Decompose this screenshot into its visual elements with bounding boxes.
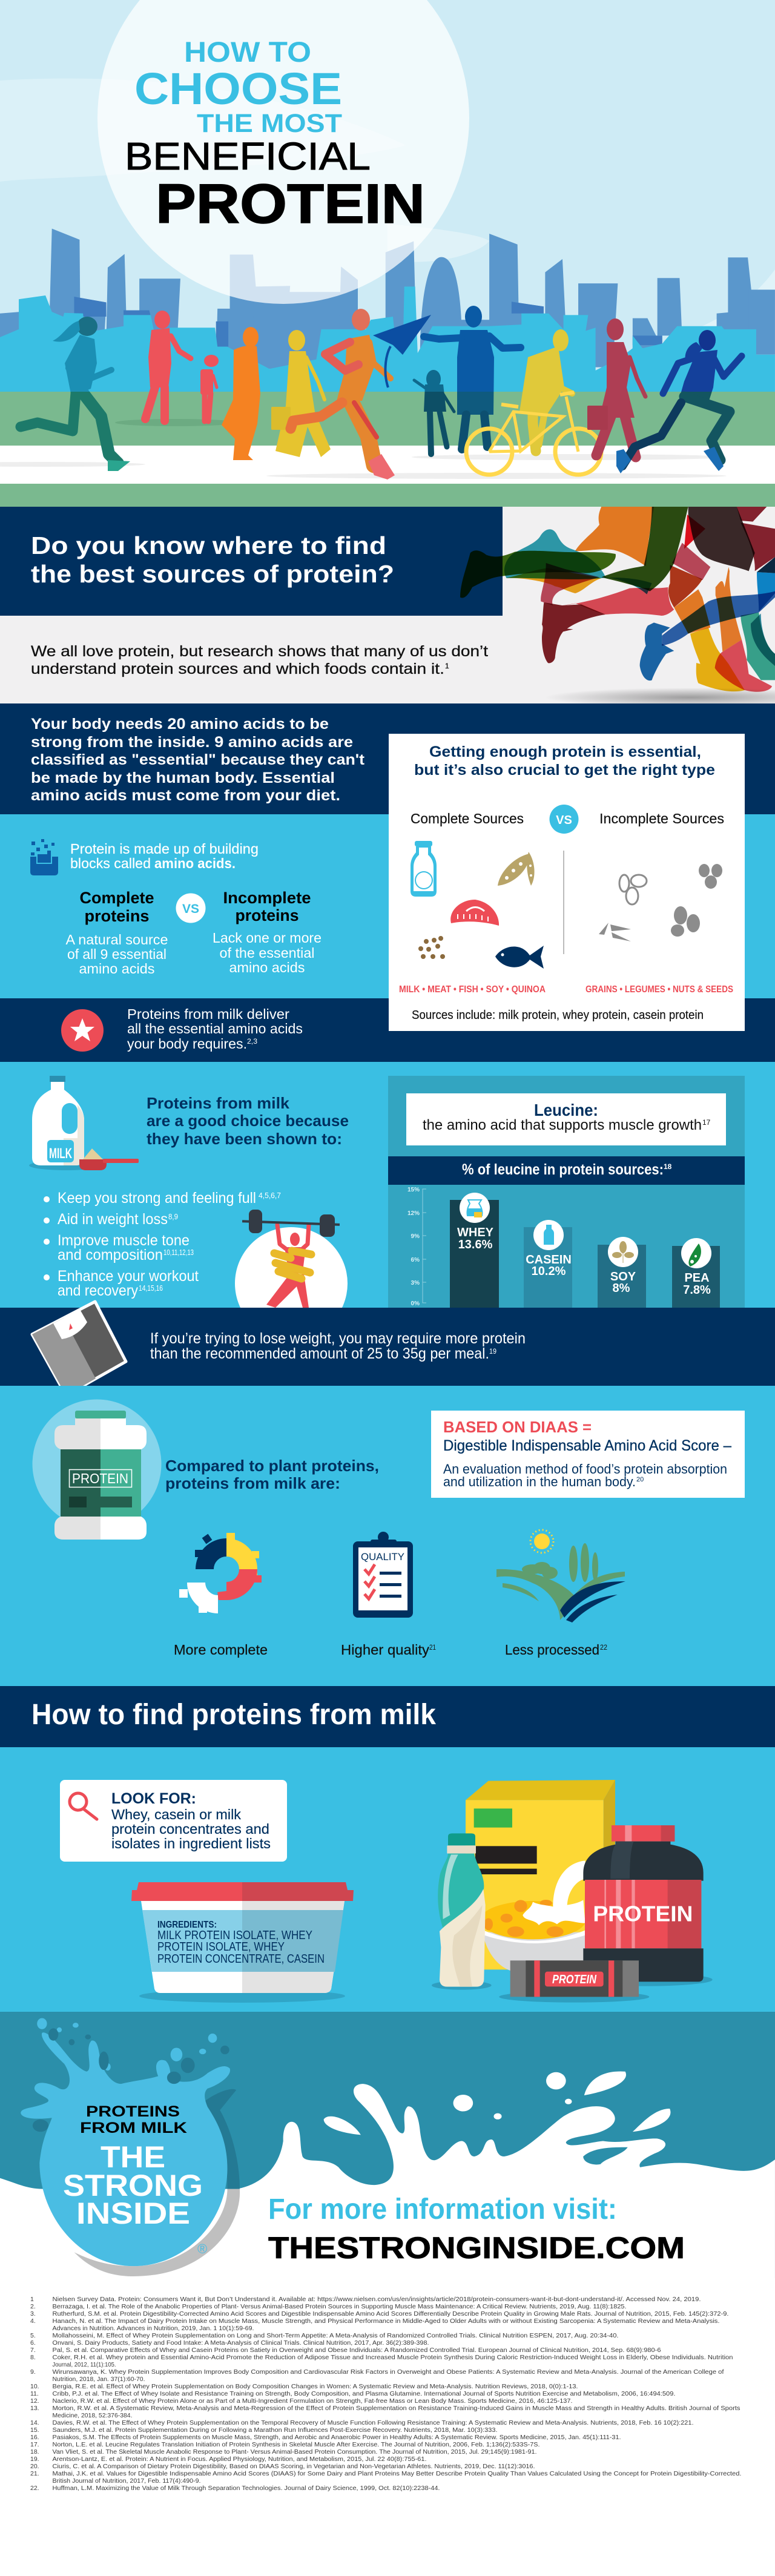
block: incomplete proteins: proteins: [235, 906, 299, 924]
leucine heading box: [406, 1093, 726, 1145]
references list: 9.: [30, 2368, 36, 2376]
callout: DIAAS definition: An evaluation method of food’s protein absorption: [443, 1461, 727, 1477]
references list: Hanach, N. et al. The Impact of Dairy Protein Intake on Muscle Mass, Muscle Strength, and Physical Performance in Middle-Aged to Older Adults with or without Existing Sarcopenia: A Systematic Review and Meta-Analysis.: [52, 2317, 719, 2325]
chart heading: 18: [664, 1162, 672, 1171]
icon: steak: [450, 900, 499, 926]
references list: Wirunsawanya, K. Whey Protein Supplementation Improves Body Composition and Cardiovascular Risk Factors in Overweight and Obese Patients: A Systematic Review and Meta-Analysis. Journal of the American College of: [52, 2368, 724, 2376]
text: proteins from milk deliver: 2,3: [247, 1037, 257, 1046]
cereal box: [466, 1780, 615, 1969]
illustration: overlapping running legs: [460, 507, 775, 707]
references list: Morton, R.W. et al. A Systematic Review, Meta-Analysis and Meta-Regression of the Effect of Protein Supplementation on Resistance Training-Induced Gains in Muscle Mass and Strength in Healthy Adults. British Journal of Sports: [52, 2405, 740, 2412]
references list: Mathai, J.K. et al. Values for Digestible Indispensable Amino Acid Scores (DIAAS) for Some Dairy and Plant Proteins May Better Describe Protein Quality Than Values Calculated Using the Concept for Protein Digestibility-Corrected.: [52, 2470, 741, 2477]
list: benefits: Enhance your workout: [58, 1268, 199, 1285]
leucine heading box: 17: [702, 1118, 711, 1127]
figure: girl: [414, 370, 454, 454]
references list: 12.: [30, 2397, 39, 2405]
references list: 15.: [30, 2426, 39, 2434]
logo: the strong inside milk drop: STRONG: [63, 2169, 203, 2202]
icon: quality clipboard: [353, 1532, 413, 1618]
illustration: ingredients tub: MILK PROTEIN ISOLATE, WHEY: [157, 1929, 312, 1942]
text: weight loss note: If you’re trying to lose weight, you may require more protein: [150, 1330, 526, 1347]
block: complete proteins: Complete: [80, 889, 154, 907]
references list: Norton, L.E. et al. Leucine Regulates Translation Initiation of Protein Synthesis in Skeletal Muscle After Exercise. The Journal of Nutrition, 2006, Feb. 1;136(2):533S-7S.: [52, 2441, 540, 2448]
panel: amino acids navy band: [0, 703, 775, 814]
heading: do you know: Do you know where to find: [31, 532, 386, 559]
block: incomplete proteins: [213, 889, 322, 975]
card heading: [414, 743, 715, 779]
chart axis: [407, 1187, 426, 1307]
callout: look for: [60, 1780, 287, 1862]
leucine heading box: the amino acid that supports muscle growth: [423, 1117, 702, 1133]
panel: leucine chart: [388, 1076, 745, 1308]
callout: DIAAS definition: Digestible Indispensable Amino Acid Score –: [443, 1437, 731, 1454]
icon: seeds: [418, 936, 445, 959]
logo: the strong inside milk drop: THE: [101, 2140, 165, 2174]
cereal bowl with milk: [480, 1860, 587, 1971]
chart axis: 6%: [411, 1257, 420, 1263]
icon: protein tub: PROTEIN: [72, 1471, 128, 1486]
text: building blocks: amino acids.: [154, 855, 236, 871]
block: incomplete proteins: of the essential: [219, 945, 315, 961]
logo: the strong inside milk drop: PROTEINS: [86, 2103, 180, 2120]
text: compared to plant proteins: [165, 1457, 379, 1492]
figure: central multi-colour runner: [291, 309, 395, 479]
divider: [563, 851, 564, 954]
icon: beans: [619, 875, 647, 904]
references list: Mollahosseini, M. Effect of Whey Protein Supplementation on Long and Short-Term Appetite: A Meta-Analysis of Randomized Controlled Trials. Clinical Nutrition ESPEN, 2017, Aug. 20:34-40.: [52, 2332, 618, 2339]
bar: pea: PEA: [684, 1271, 710, 1285]
heading band: how to find proteins from milk: [0, 1686, 775, 1747]
heading: do you know: the best sources of protein?: [31, 560, 394, 588]
heading: do you know: [31, 532, 394, 588]
text: proteins from milk deliver: Proteins from milk deliver: [127, 1006, 289, 1022]
text: weight loss note: [150, 1330, 526, 1362]
hero title: CHOOSE: [134, 64, 342, 114]
references list: Arentson-Lantz, E. et al. Protein: A Nutrient in Focus. Applied Physiology, Nutrition, and Metabolism, 2015, Jul. 22 40(8):755-61.: [52, 2456, 426, 2463]
text: proteins from milk deliver: all the essential amino acids: [127, 1021, 303, 1036]
list: benefits: and recovery: [58, 1282, 138, 1299]
references list: Van Vliet, S. et al. The Skeletal Muscle Anabolic Response to Plant- Versus Animal-Based Protein Consumption. The Journal of Nutrition, 2015, Jul. 29;145(9):1981-91.: [52, 2448, 536, 2456]
call to action: more information: [268, 2193, 685, 2265]
protein bar: [499, 1960, 649, 2003]
red food lists: GRAINS • LEGUMES • NUTS & SEEDS: [585, 984, 733, 995]
skyline: back buildings: [0, 229, 775, 374]
figure: yellow woman: [271, 330, 331, 457]
references list: 14.: [30, 2419, 39, 2426]
hero title: [125, 36, 425, 235]
references list: Huffman, L.M. Maximizing the Value of Milk Through Separation Technologies. Journal of Dairy Science, 1999, Oct. 82(10):2238-44.: [52, 2485, 440, 2492]
list: benefits: 10,11,12,13: [163, 1248, 194, 1257]
references list: 6.: [30, 2339, 36, 2347]
illustration: ingredients tub: INGREDIENTS:: [157, 1920, 217, 1930]
protein jar: PROTEIN: [593, 1901, 693, 1926]
panel: weight loss navy band: [0, 1308, 775, 1386]
figure: teal runner: [21, 317, 130, 471]
references list: 1: [30, 2296, 34, 2303]
illustration: ingredients tub: [131, 1882, 354, 2003]
references list: Rutherfurd, S.M. et al. Protein Digestibility-Corrected Amino Acid Scores and Digestible Indispensable Amino Acid Scores Differentially Describe Protein Quality in Growing Male Rats. Journal of Nutrition, 2015, Feb. 145(2):372-9.: [52, 2310, 729, 2317]
callout: DIAAS definition: and utilization in the human body.: [443, 1474, 636, 1489]
call to action: more information: For more information visit:: [268, 2193, 617, 2225]
text: amino acid explanation: be made by the human body. Essential: [31, 769, 335, 786]
icon: vs badge white: VS: [182, 902, 199, 916]
block: complete proteins: of all 9 essential: [67, 946, 167, 962]
references list: Pasiakos, S.M. The Effects of Protein Supplements on Muscle Mass, Strength, and Aerobic and Anaerobic Power in Healthy Adults: A Systematic Review. Sports Medicine, 2015, Jan. 45(1):111-31.: [52, 2434, 621, 2441]
block: complete proteins: [65, 889, 168, 977]
bar: whey: WHEY: [457, 1226, 494, 1239]
skyline: front buildings: [0, 286, 775, 392]
panel: plant comparison cyan background: [0, 1386, 775, 1686]
callout: DIAAS definition: 20: [636, 1476, 644, 1483]
bar: casein: 10.2%: [532, 1265, 566, 1278]
bar: soy: SOY: [610, 1270, 636, 1283]
list: benefits: 14,15,16: [139, 1283, 163, 1293]
logo: the strong inside milk drop: FROM MILK: [80, 2120, 187, 2136]
call to action: more information: THESTRONGINSIDE.COM: [268, 2231, 685, 2265]
bar: casein: CASEIN: [526, 1253, 572, 1267]
text: proteins from milk are a good choice: [147, 1094, 349, 1148]
column headings: [411, 811, 724, 826]
text: building blocks: blocks called: [70, 855, 151, 871]
references list: Cribb, P.J. et al. The Effect of Whey Isolate and Resistance Training on Strength, Body Composition, and Plasma Glutamine. International Journal of Sports Nutrition Exercise and Metabolism, 2006, 16:494:509.: [52, 2390, 676, 2397]
references list: [30, 2296, 741, 2492]
icon: magnifying glass: [70, 1793, 97, 1819]
illustration: milk splash wave: [0, 2071, 775, 2576]
references list: 22.: [30, 2485, 39, 2492]
block: complete proteins: A natural source: [65, 932, 168, 947]
references list: 16.: [30, 2434, 39, 2441]
references list: 21.: [30, 2470, 39, 2477]
icon: vs badge cyan: VS: [556, 814, 572, 827]
logo: the strong inside milk drop: ®: [197, 2241, 207, 2256]
illustration: protein products: [432, 1780, 713, 2003]
hero title: THE MOST: [197, 109, 342, 138]
labels: comparison points: More complete: [174, 1642, 268, 1658]
callout: look for: protein concentrates and: [111, 1821, 269, 1837]
text: proteins from milk deliver: your body requires.: [127, 1036, 247, 1052]
icon: building blocks: [30, 839, 58, 875]
milk bottle: [432, 1833, 492, 1990]
illustration: ingredients tub: PROTEIN CONCENTRATE, CASEIN: [157, 1952, 325, 1966]
chart axis: 9%: [411, 1233, 420, 1240]
protein bar: PROTEIN: [552, 1973, 596, 1986]
hero sun circle: [97, 0, 469, 304]
references list: 18.: [30, 2448, 39, 2456]
logo: the strong inside milk drop: INSIDE: [76, 2196, 190, 2230]
bar: soy: 8%: [613, 1282, 630, 1295]
chart axis: 3%: [411, 1280, 420, 1286]
figure: cyclist on yellow bike: [466, 329, 601, 475]
block: incomplete proteins: Lack one or more: [213, 930, 322, 946]
icon: quality clipboard: QUALITY: [361, 1551, 404, 1563]
icon: bathroom scale: [32, 1302, 126, 1395]
icon: pea pod: [498, 852, 535, 886]
references list: 3.: [30, 2310, 36, 2317]
list: benefits: Improve muscle tone: [58, 1232, 190, 1249]
figure: coral child: [200, 355, 219, 421]
panel: benefits cyan background: [0, 1062, 775, 1308]
text: amino acid explanation: strong from the inside. 9 amino acids are: [31, 734, 353, 751]
text: proteins from milk are a good choice: they have been shown to:: [147, 1130, 342, 1148]
hero sky background: [0, 0, 775, 507]
references list: 8.: [30, 2354, 36, 2361]
icon: farm landscape: [496, 1530, 625, 1622]
text: weight loss note: than the recommended amount of 25 to 35g per meal.: [150, 1345, 489, 1362]
heading band: how to find proteins from milk: How to find proteins from milk: [31, 1699, 436, 1731]
text: intro: [31, 643, 488, 677]
icon: milk jug and scoop: [29, 1076, 139, 1170]
labels: comparison points: Less processed: [505, 1642, 599, 1658]
bar: pea: 7.8%: [683, 1283, 711, 1297]
icon: puzzle gear: [179, 1533, 262, 1613]
text: intro: We all love protein, but research shows that many of us don’t: [31, 643, 488, 660]
panel: sources comparison card: [389, 734, 745, 1031]
text: intro: understand protein sources and which foods contain it.: [31, 660, 444, 677]
bar: whey: [450, 1193, 499, 1308]
callout: DIAAS definition: [431, 1411, 745, 1498]
icon: grains: [599, 923, 631, 941]
callout: look for: LOOK FOR:: [111, 1790, 196, 1807]
labels: comparison points: 21: [429, 1643, 436, 1652]
icon: red star badge: [61, 1009, 104, 1052]
column headings: Incomplete Sources: [599, 811, 724, 826]
figure: umbrella: [373, 315, 431, 387]
text: proteins from milk deliver: [127, 1006, 303, 1052]
references list: Ciuris, C. et al. A Comparison of Dietary Protein Digestibility, Based on DIAAS Scoring, in Vegetarian and Non-Vegetarian Athletes. Nutrients, 2019, Dec. 11(12):3016.: [52, 2463, 535, 2470]
list: benefits: [44, 1190, 281, 1299]
references list: Nielsen Survey Data. Protein: Consumers Want it, But Don’t Understand it. Available at: https://www.nielsen.com/us/en/insights/article/2018/protein-consumers-want-it-but-dont-understand-it/. Accessed Nov. 24, 2019.: [52, 2296, 701, 2303]
panel: do you know background: [0, 507, 775, 703]
bar: casein: [524, 1220, 572, 1308]
references list: Pal, S. et al. Comparative Effects of Whey and Casein Proteins on Satiety in Overweight and Obese Individuals: A Randomized Controlled Trial. European Journal of Clinical Nutrition, 2014, Sep. 68(9):980-6: [52, 2347, 661, 2354]
panel: cyan building blocks background: [0, 814, 775, 998]
list: benefits: Aid in weight loss: [58, 1211, 168, 1228]
icon: hazelnuts: [699, 864, 722, 889]
icon: milk bottle: [411, 841, 437, 897]
text: amino acid explanation: amino acids must come from your diet.: [31, 787, 340, 804]
logo: the strong inside milk drop: [21, 2018, 240, 2276]
callout: look for: Whey, casein or milk: [111, 1807, 241, 1822]
figure: man in blue: [424, 306, 521, 449]
figure: woman with briefcase: [587, 318, 645, 457]
leucine heading box: Leucine:: [534, 1101, 598, 1119]
labels: comparison points: 22: [600, 1643, 607, 1652]
references list: Journal, 2012, 11(1):105.: [52, 2361, 116, 2368]
panel: milk proteins navy band: [0, 998, 775, 1062]
references list: 10.: [30, 2383, 39, 2390]
bar: pea: [672, 1238, 720, 1308]
callout: look for: isolates in ingredient lists: [111, 1836, 271, 1851]
list: benefits: 8,9: [168, 1212, 178, 1221]
hero title: BENEFICIAL: [125, 134, 371, 178]
figure: navy runner: [616, 330, 742, 473]
hero title: HOW TO: [184, 36, 311, 68]
icon: protein tub: [33, 1400, 161, 1540]
hero title: PROTEIN: [156, 173, 425, 235]
icon: vs badge white: [176, 894, 206, 923]
references list: Coker, R.H. et al. Whey protein and Essential Amino-Acid Promote the Reduction of Adipose Tissue and Increased Muscle Protein Synthesis During Caloric Restriction-Induced Weight Loss in Elderly, Obese Individuals. Nutrition: [52, 2354, 733, 2361]
references list: Saunders, M.J. et al. Protein Supplementation During or Following a Marathon Run Influences Post-Exercise Recovery. Nutrients, 2018, Mar. 10(3):333.: [52, 2426, 498, 2434]
labels: comparison points: [174, 1642, 607, 1658]
block: incomplete proteins: amino acids: [229, 960, 305, 975]
text: proteins from milk are a good choice: Proteins from milk: [147, 1094, 290, 1112]
protein jar: [579, 1825, 713, 1986]
icon: weightlifter with measuring tape: [235, 1210, 348, 1308]
icon: almonds: [671, 906, 700, 937]
figure: coral woman: [145, 311, 191, 421]
text: amino acid explanation: Your body needs 20 amino acids to be: [31, 716, 329, 733]
text: weight loss note: 19: [489, 1347, 496, 1356]
illustration: ingredients tub: PROTEIN ISOLATE, WHEY: [157, 1940, 285, 1954]
references list: 20.: [30, 2463, 39, 2470]
references list: Medicine, 2018, 52:376-384.: [52, 2412, 132, 2419]
references list: Advances in Nutrition. Advances in Nutrition, 2019, Jan. 1 10(1):59-69.: [52, 2325, 254, 2332]
references list: British Journal of Nutrition, 2017, Feb. 117(4):490-9.: [52, 2477, 201, 2485]
references list: Davies, R.W. et al. The Effect of Whey Protein Supplementation on the Temporal Recovery of Muscle Function Following Resistance Training: A Systematic Review and Meta-Analysis. Nutrients, 2018, Feb. 16 10(2):221.: [52, 2419, 694, 2426]
sources note: Sources include: milk protein, whey protein, casein protein: [412, 1009, 704, 1022]
panel: footer teal background: [0, 2012, 775, 2278]
callout: DIAAS definition: BASED ON DIAAS =: [443, 1418, 592, 1436]
references list: 13.: [30, 2405, 39, 2412]
references list: 4.: [30, 2317, 36, 2325]
ground: grass and road: [0, 392, 775, 507]
bar: whey: 13.6%: [458, 1238, 493, 1251]
text: building blocks: [70, 841, 259, 871]
text: amino acid explanation: classified as "essential" because they can't: [31, 751, 365, 768]
red food lists: [399, 984, 733, 995]
list: benefits: Keep you strong and feeling full: [58, 1190, 256, 1207]
chart axis: 15%: [407, 1187, 420, 1193]
references list: 11.: [30, 2390, 39, 2397]
figure: orange man: [222, 327, 260, 460]
text: compared to plant proteins: proteins from milk are:: [165, 1474, 340, 1492]
icon: milk jug and scoop: MILK: [49, 1145, 72, 1162]
column headings: Complete Sources: [411, 811, 524, 826]
block: incomplete proteins: Incomplete: [223, 889, 311, 907]
chart heading: % of leucine in protein sources:: [462, 1161, 664, 1178]
red food lists: MILK • MEAT • FISH • SOY • QUINOA: [399, 984, 546, 995]
list: benefits: and composition: [58, 1247, 163, 1263]
references list: 2.: [30, 2303, 36, 2310]
list: benefits: 4,5,6,7: [259, 1191, 281, 1200]
panel: how to find cyan background: [0, 1747, 775, 2012]
icon: vs badge cyan: [550, 805, 579, 834]
references list: Onvani, S. Dairy Products, Satiety and Food Intake: A Meta-Analysis of Clinical Trials. Clinical Nutrition, 2017, Apr. 36(2):389-398.: [52, 2339, 429, 2347]
block: complete proteins: proteins: [85, 907, 149, 925]
text: compared to plant proteins: Compared to plant proteins,: [165, 1457, 379, 1475]
references list: 5.: [30, 2332, 36, 2339]
chart heading: [388, 1156, 745, 1185]
chart axis: 12%: [407, 1210, 420, 1217]
references list: 7.: [30, 2347, 36, 2354]
chart axis: 0%: [411, 1300, 420, 1307]
references list: 19.: [30, 2456, 39, 2463]
text: intro: 1: [445, 662, 449, 670]
card heading: Getting enough protein is essential,: [429, 743, 701, 760]
references list: Naclerio, R.W. et al. Effect of Whey Protein Alone or as Part of a Multi-Ingredient Formulation on Strength, Fat-free Mass or Lean Body Mass. Sports Medicine, 2016, 46:125-137.: [52, 2397, 573, 2405]
icon: fish: [495, 946, 544, 969]
references list: Berrazaga, I. et al. The Role of the Anabolic Properties of Plant- Versus Animal-Based Protein Sources in Supporting Muscle Mass Maintenance: A Critical Review. Nutrients, 2019, Aug. 11(8):1825.: [52, 2303, 626, 2310]
references list: Nutrition, 2018, Jan. 37(1):60-70.: [52, 2376, 145, 2383]
text: proteins from milk are a good choice: are a good choice because: [147, 1112, 349, 1130]
labels: comparison points: Higher quality: [341, 1642, 430, 1658]
text: amino acid explanation: [31, 716, 365, 804]
references list: 17.: [30, 2441, 39, 2448]
text: building blocks: Protein is made up of building: [70, 841, 259, 857]
card heading: but it’s also crucial to get the right type: [414, 762, 715, 779]
references list: Bergia, R.E. et al. Effect of Whey Protein Supplementation on Body Composition Changes in Women: A Systematic Review and Meta-Analysis. Nutrition Reviews, 2018, 0(0):1-13.: [52, 2383, 578, 2390]
block: complete proteins: amino acids: [79, 961, 155, 977]
bar: soy: [598, 1237, 646, 1308]
